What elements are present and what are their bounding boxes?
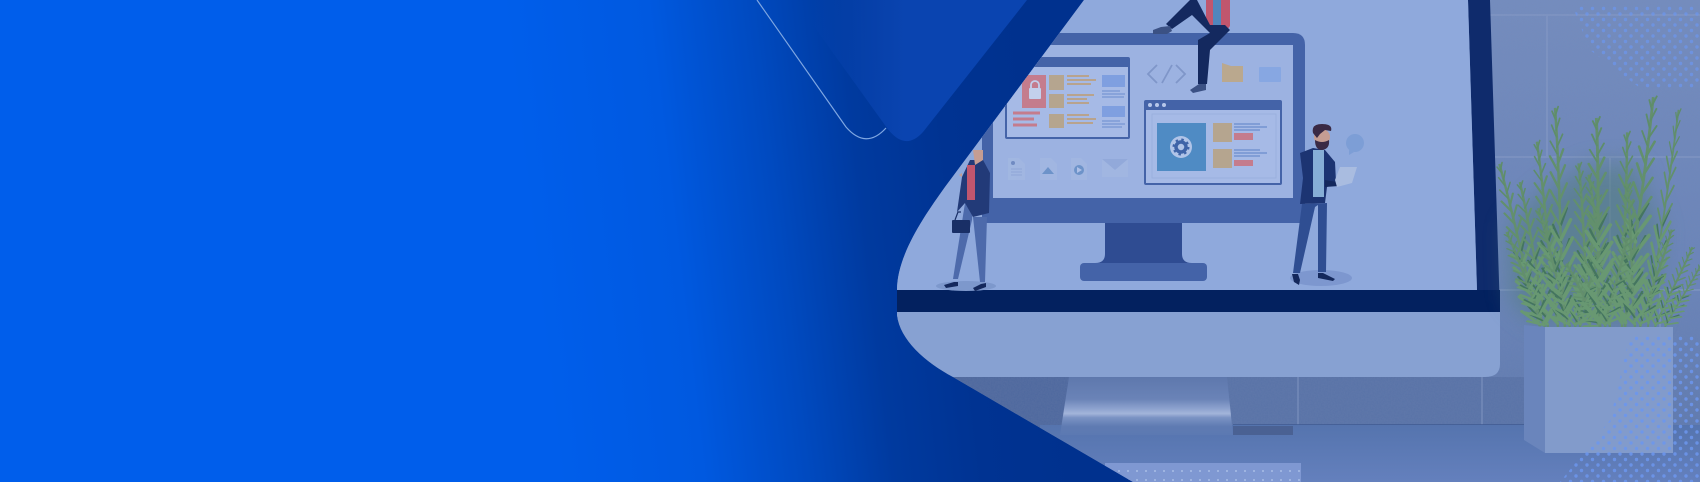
icon: mail bbox=[1259, 67, 1281, 82]
icons: file row bbox=[1011, 159, 1128, 176]
monitor bezel bbox=[1468, 0, 1500, 290]
monitor bottom bezel bbox=[880, 290, 1500, 312]
halftone dots top right bbox=[1572, 5, 1700, 88]
monitor chin bbox=[880, 312, 1500, 377]
illustration: large monitor bbox=[982, 33, 1305, 281]
desk bbox=[1040, 425, 1700, 482]
halftone dots bottom right bbox=[1560, 335, 1700, 482]
monitor stand bbox=[1062, 382, 1232, 428]
plant pot bbox=[1524, 325, 1673, 453]
illustration: security window bbox=[1005, 57, 1130, 139]
figure: woman bbox=[936, 150, 996, 291]
illustration: settings window bbox=[1144, 100, 1282, 185]
wall bbox=[880, 0, 1700, 482]
masked photo of desktop monitor bbox=[880, 0, 1700, 482]
keyboard bbox=[1105, 463, 1301, 482]
monitor screen bbox=[880, 0, 1477, 290]
plant bbox=[1486, 94, 1700, 334]
icon: code brackets bbox=[1148, 65, 1185, 83]
hero banner bbox=[610, 0, 1700, 482]
icon: folder bbox=[1222, 63, 1243, 82]
figure: man with laptop bbox=[1290, 124, 1364, 286]
thin outline line bbox=[757, 0, 886, 139]
dark chevron shape top bbox=[795, 0, 1027, 141]
figure: sitting person bbox=[1153, 0, 1230, 93]
